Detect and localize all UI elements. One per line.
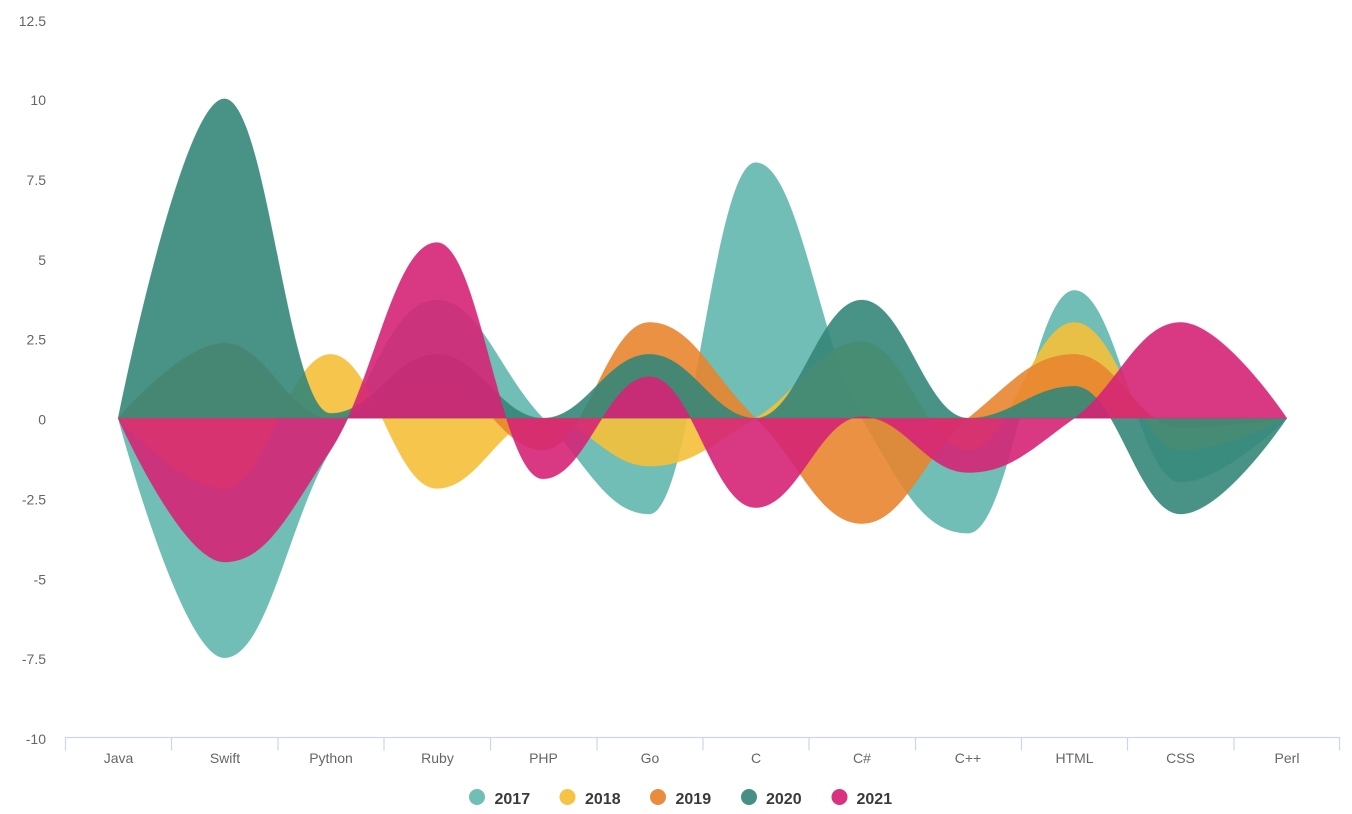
legend item 2018: 2018	[585, 791, 621, 808]
x axis labels	[104, 750, 1299, 766]
y axis labels: -10	[26, 731, 46, 747]
legend item 2017	[469, 789, 530, 808]
x axis labels: C++	[955, 750, 981, 766]
y axis labels: 5	[38, 252, 46, 268]
legend item 2019	[650, 789, 711, 808]
x axis labels: C	[751, 750, 761, 766]
legend item 2020: 2020	[766, 791, 802, 808]
legend item 2017: 2017	[494, 791, 530, 808]
series 2021	[118, 242, 1287, 562]
x axis labels: PHP	[529, 750, 558, 766]
legend item 2020	[741, 789, 802, 808]
x axis labels: Java	[104, 750, 133, 766]
x axis labels: HTML	[1055, 750, 1094, 766]
legend	[469, 789, 892, 808]
y axis labels: 7.5	[27, 172, 46, 188]
series 2017	[118, 163, 1287, 658]
series 2019	[118, 322, 1287, 524]
y axis labels: 12.5	[19, 13, 46, 29]
series 2020	[118, 99, 1287, 514]
legend item 2021	[832, 789, 892, 808]
legend item 2021: 2021	[856, 791, 892, 808]
y axis labels: 0	[38, 412, 46, 428]
y axis labels: 10	[30, 92, 46, 108]
legend item 2018	[560, 789, 621, 808]
x axis labels: Ruby	[421, 750, 454, 766]
y axis labels: 2.5	[27, 332, 46, 348]
x axis labels: Go	[641, 750, 660, 766]
x axis labels: Python	[309, 750, 353, 766]
x axis labels: CSS	[1166, 750, 1195, 766]
y axis labels: -5	[34, 571, 46, 587]
legend item 2019: 2019	[676, 791, 711, 808]
x axis labels: Perl	[1275, 750, 1299, 766]
y axis labels: -7.5	[22, 651, 46, 667]
y axis labels: -2.5	[22, 492, 46, 508]
series 2018	[118, 322, 1287, 488]
x axis labels: C#	[853, 750, 871, 766]
x axis line and ticks	[65, 738, 1340, 750]
x axis labels: Swift	[210, 750, 240, 766]
y axis labels	[19, 13, 46, 747]
area chart	[118, 99, 1287, 658]
